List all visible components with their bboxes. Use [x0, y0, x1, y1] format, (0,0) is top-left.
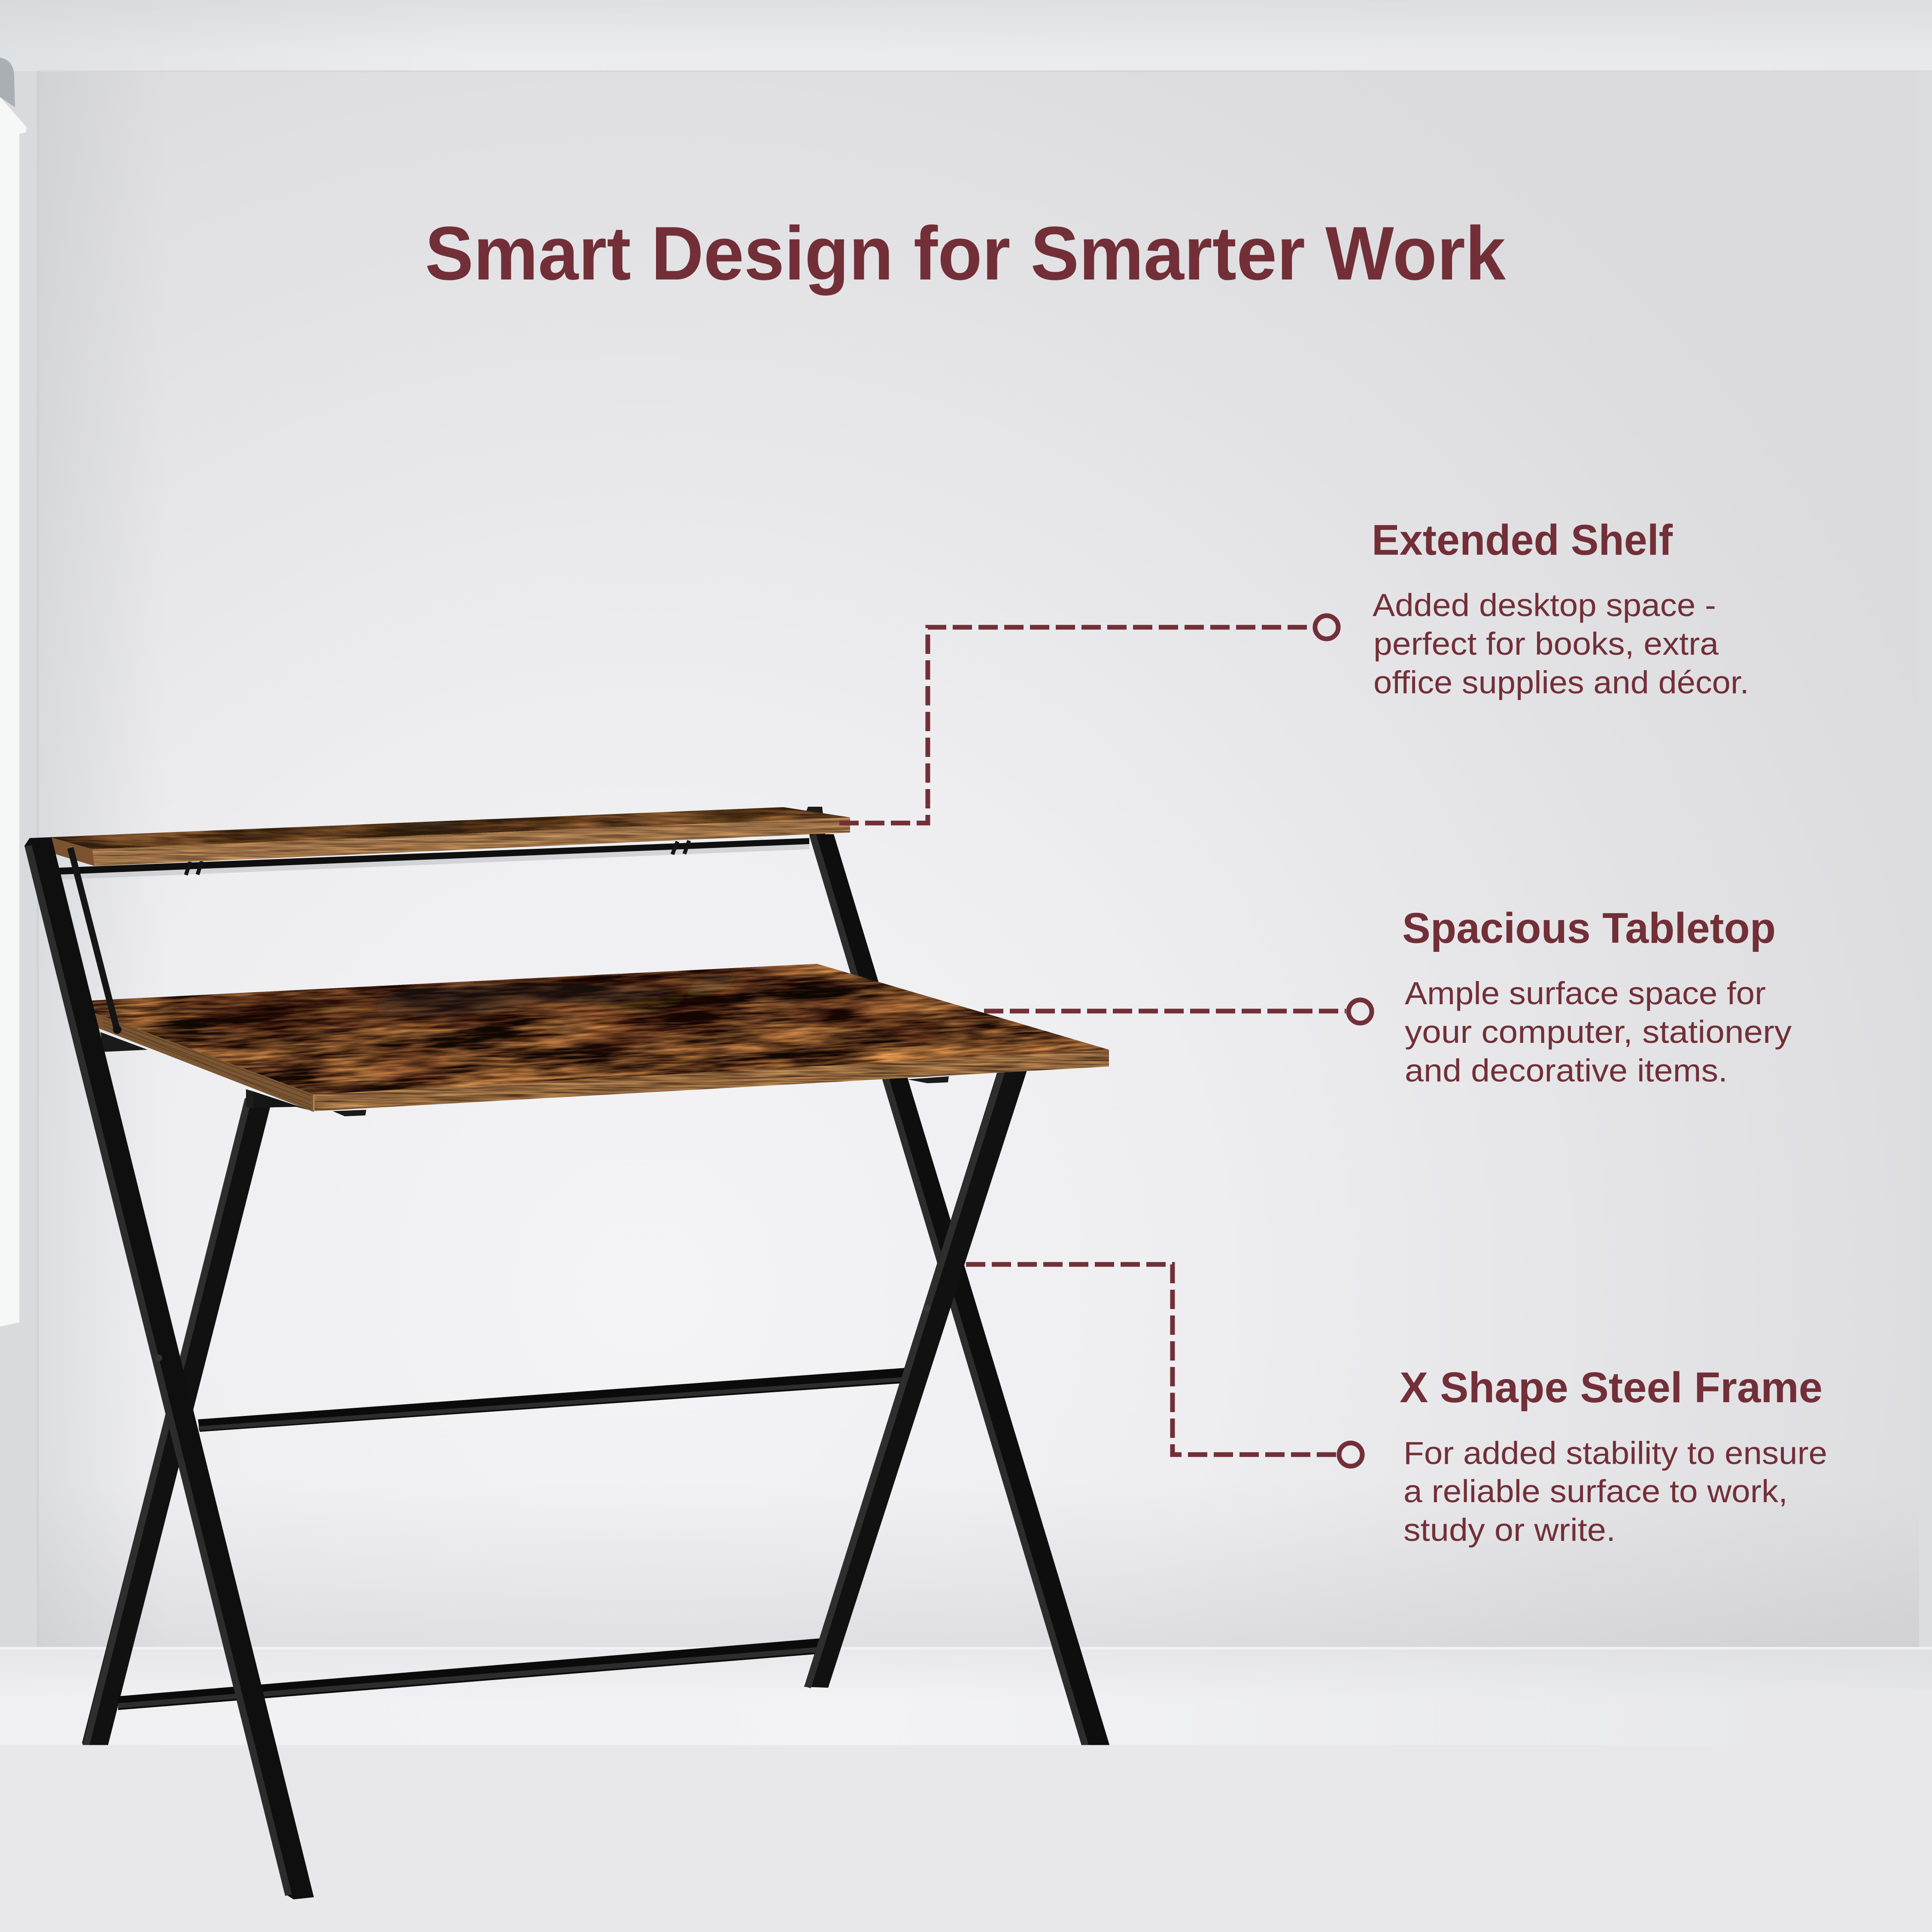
heading: Extended Shelf [1372, 516, 1673, 564]
connector ring [1315, 616, 1338, 639]
right long leg [806, 807, 1130, 1813]
right lower leg [804, 1069, 1027, 1688]
connector line [966, 1264, 1337, 1455]
shelf strap [70, 848, 122, 1034]
callout: extended shelf [839, 516, 1749, 823]
heading: Spacious Tabletop [1402, 904, 1776, 952]
description: perfect for books, extra [1373, 626, 1719, 662]
description: Ample surface space for [1405, 975, 1766, 1011]
tabletop surface [92, 964, 1109, 1094]
tabletop front edge [311, 1048, 1112, 1112]
upper shelf [50, 807, 850, 866]
left lower leg [82, 1089, 313, 1750]
description [1403, 1435, 1827, 1548]
rear table bracket [100, 1032, 148, 1052]
connector ring [1349, 1000, 1372, 1023]
description: For added stability to ensure [1403, 1435, 1827, 1471]
description: your computer, stationery [1405, 1014, 1792, 1050]
connector ring [1339, 1443, 1362, 1466]
lower crossbar [118, 1638, 820, 1710]
shelf support rod [59, 838, 809, 880]
main tabletop [92, 964, 1109, 1116]
description: office supplies and décor. [1373, 665, 1749, 700]
description: a reliable surface to work, [1403, 1473, 1788, 1509]
tabletop left edge [95, 1013, 315, 1112]
upper crossbar [198, 1368, 908, 1432]
callout: spacious tabletop [984, 904, 1792, 1088]
connector line [984, 1009, 1346, 1013]
folding desk [24, 803, 1142, 1899]
title: Smart Design for Smarter Work [425, 211, 1506, 296]
heading: X Shape Steel Frame [1400, 1364, 1823, 1412]
left long leg [24, 837, 314, 1899]
description: Added desktop space - [1373, 587, 1716, 623]
description [1405, 975, 1792, 1088]
callout: x shape steel frame [966, 1264, 1827, 1548]
connector line [839, 627, 1312, 823]
description: and decorative items. [1405, 1053, 1728, 1088]
description: study or write. [1403, 1512, 1616, 1548]
description [1373, 587, 1749, 700]
